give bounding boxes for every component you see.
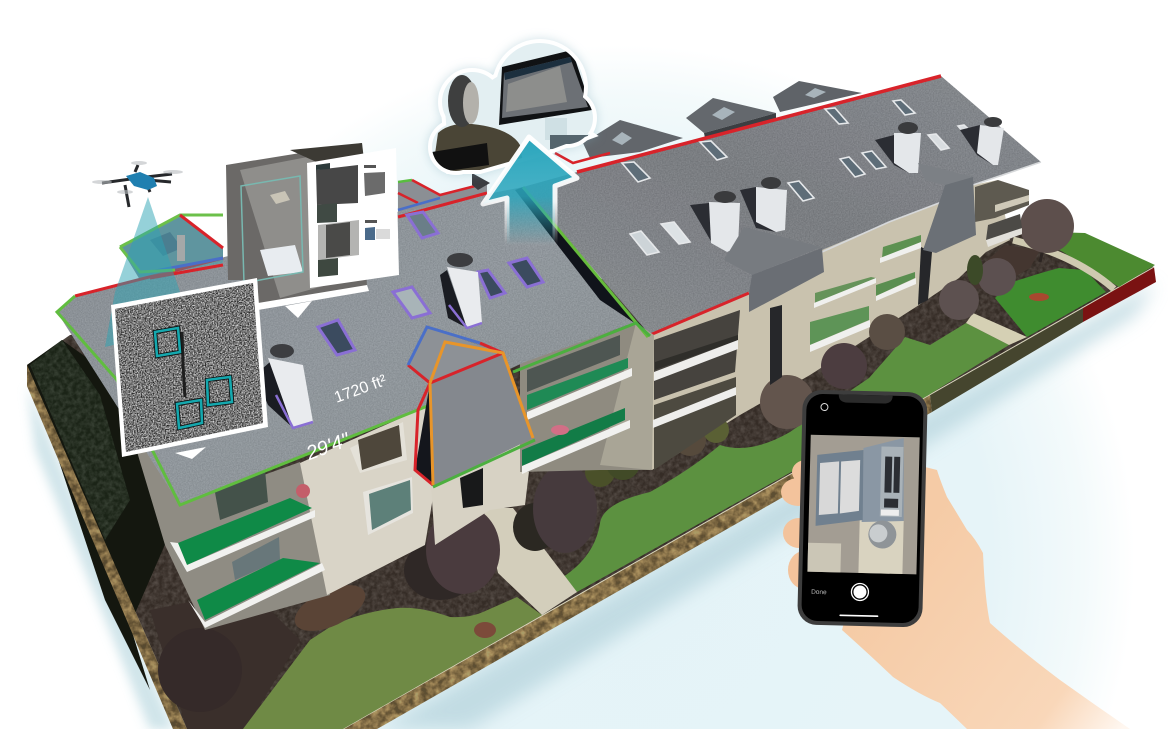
roof measurement: area: 1720 ft² [332, 372, 390, 407]
left balconies [170, 484, 325, 628]
close-up photo [226, 143, 367, 308]
soil edge left [27, 365, 187, 729]
left roof skylights [318, 212, 543, 355]
eave line [650, 293, 749, 335]
notch [839, 394, 893, 404]
cloud scene [432, 43, 593, 171]
shrubs and trees [158, 199, 1074, 712]
left wall and shadow [117, 323, 654, 630]
far wall, right wing [650, 180, 1010, 470]
dark recesses in right wing [654, 247, 932, 470]
Done label: Done [811, 589, 827, 596]
roof measurement: length: 29'4" [302, 429, 353, 465]
crack [182, 332, 185, 397]
cloud outline [432, 43, 593, 171]
white frame [111, 278, 268, 457]
propellers [92, 161, 183, 194]
drone body [126, 172, 157, 190]
right roof skylights [622, 100, 978, 255]
callout tail [175, 447, 206, 459]
left roof chimneys [255, 253, 482, 428]
drone [92, 161, 183, 207]
upper back roof [120, 153, 610, 280]
camera photo [807, 435, 920, 574]
hand back [842, 467, 1130, 729]
upper roof scan area with teal overlay [120, 215, 223, 278]
monitor [499, 50, 592, 125]
home indicator [839, 614, 878, 617]
center balconies [522, 335, 632, 474]
right roof chimneys [690, 117, 1004, 252]
report sheet [307, 148, 399, 288]
smartphone [797, 390, 928, 628]
background houses [583, 81, 862, 158]
manhole [474, 622, 496, 638]
damage markers [155, 328, 232, 428]
left roof section [50, 180, 650, 510]
left wing windows [214, 422, 413, 580]
right roof section [520, 70, 1050, 340]
soil edge front [20, 267, 1156, 729]
drone arms [102, 165, 172, 207]
cloud with desk user [425, 35, 600, 175]
flag [296, 484, 310, 498]
user torso [434, 124, 522, 171]
walkways [483, 240, 1114, 615]
white bottom edge [258, 285, 369, 310]
hand holding phone [781, 460, 1130, 729]
upload arrow [483, 137, 577, 245]
fingers [781, 460, 820, 589]
ridge line [577, 76, 941, 172]
user head [448, 75, 472, 127]
balconies right wing [653, 235, 921, 428]
right dormers [724, 163, 976, 312]
callout tail [285, 301, 312, 318]
phone screen [801, 394, 924, 623]
ground surface [20, 225, 1160, 729]
outline lines [75, 258, 223, 296]
right end balconies [975, 180, 1029, 247]
evergreen foliage at far left [30, 340, 130, 540]
inspection report callout [226, 143, 399, 318]
center dormer with measure lines [408, 327, 535, 487]
shingle close-up callout [110, 278, 270, 459]
lawns [243, 232, 1155, 729]
phone body [797, 390, 928, 628]
chair [432, 143, 489, 172]
flash icon [821, 403, 828, 411]
drone scan cone [105, 197, 180, 347]
shutter button [851, 583, 869, 601]
shingle texture [115, 283, 263, 452]
